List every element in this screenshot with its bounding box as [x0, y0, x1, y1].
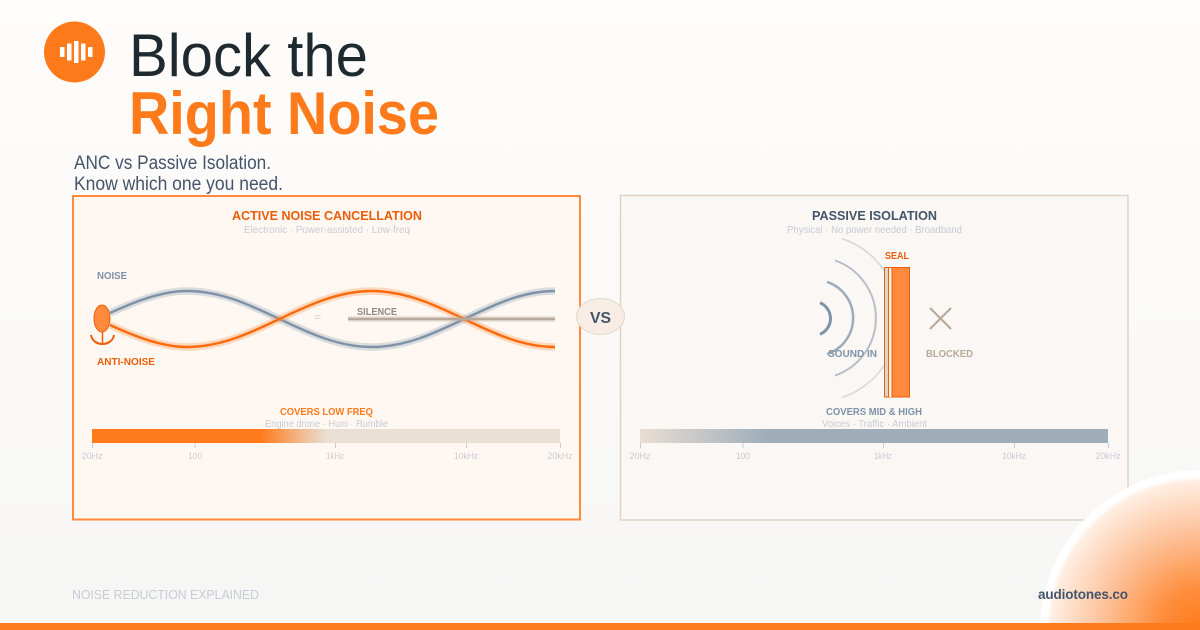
silence line: [348, 316, 555, 322]
frequency scale: low: 20kHz: [548, 451, 573, 462]
logo icon: sound bars: [44, 22, 105, 82]
label: blocked: BLOCKED: [926, 349, 973, 360]
label: seal: SEAL: [885, 251, 909, 262]
panel heading: ANC: ACTIVE NOISE CANCELLATION: [232, 208, 422, 223]
panel: passive isolation: [620, 196, 1128, 520]
frequency bar: low: [92, 429, 560, 443]
frequency scale: mid and high: 20kHz: [1096, 451, 1121, 462]
frequency bar: mid and high: [640, 429, 1108, 443]
footer bar: [0, 623, 1200, 630]
label: anti-noise: ANTI-NOISE: [97, 357, 155, 368]
footer brand: audiotones.co: [1038, 587, 1128, 602]
frequency scale: mid and high: 20Hz: [630, 451, 651, 462]
icon: microphone: [91, 305, 114, 344]
noise wave: [110, 291, 555, 347]
coverage label: mid and high: COVERS MID & HIGH: [826, 407, 922, 418]
corner glow decoration: [1040, 470, 1200, 630]
label: silence: SILENCE: [357, 307, 397, 318]
sound wave arcs: [820, 238, 899, 398]
footer label: NOISE REDUCTION EXPLAINED: [72, 587, 259, 602]
coverage label: low freq: COVERS LOW FREQ: [280, 407, 373, 418]
frequency scale: low: 10kHz: [454, 451, 478, 462]
subtitle: [74, 153, 283, 195]
label: sound in: SOUND IN: [828, 349, 877, 360]
frequency scale: mid and high: 10kHz: [1002, 451, 1026, 462]
coverage examples: mid and high: Voices · Traffic · Ambient: [822, 418, 927, 430]
frequency scale: mid and high: [630, 443, 1121, 462]
subtitle: Know which one you need.: [74, 174, 283, 195]
title: Block the: [129, 22, 368, 89]
frequency scale: low: [82, 443, 573, 462]
frequency scale: low: 1kHz: [326, 451, 344, 462]
label: noise: NOISE: [97, 271, 127, 282]
title: Right Noise: [129, 80, 439, 147]
icon: blocked cross: [930, 308, 951, 329]
vs badge: [576, 298, 624, 334]
panel subheading: ANC: Electronic · Power-assisted · Low-freq: [244, 224, 410, 236]
vs badge: VS: [590, 310, 611, 327]
panel heading: passive: PASSIVE ISOLATION: [812, 208, 937, 223]
frequency scale: mid and high: 1kHz: [874, 451, 892, 462]
frequency scale: mid and high: 100: [736, 451, 750, 462]
panel: active noise cancellation: [73, 196, 580, 520]
anti-noise wave: [110, 291, 555, 347]
subtitle: ANC vs Passive Isolation.: [74, 153, 271, 174]
frequency scale: low: 100: [188, 451, 202, 462]
title: [129, 22, 439, 147]
coverage examples: low freq: Engine drone · Hum · Rumble: [265, 418, 388, 430]
equals sign: =: [314, 312, 321, 324]
seal barrier: [884, 268, 910, 397]
frequency scale: low: 20Hz: [82, 451, 103, 462]
panel subheading: passive: Physical · No power needed · Broadband: [787, 224, 962, 236]
